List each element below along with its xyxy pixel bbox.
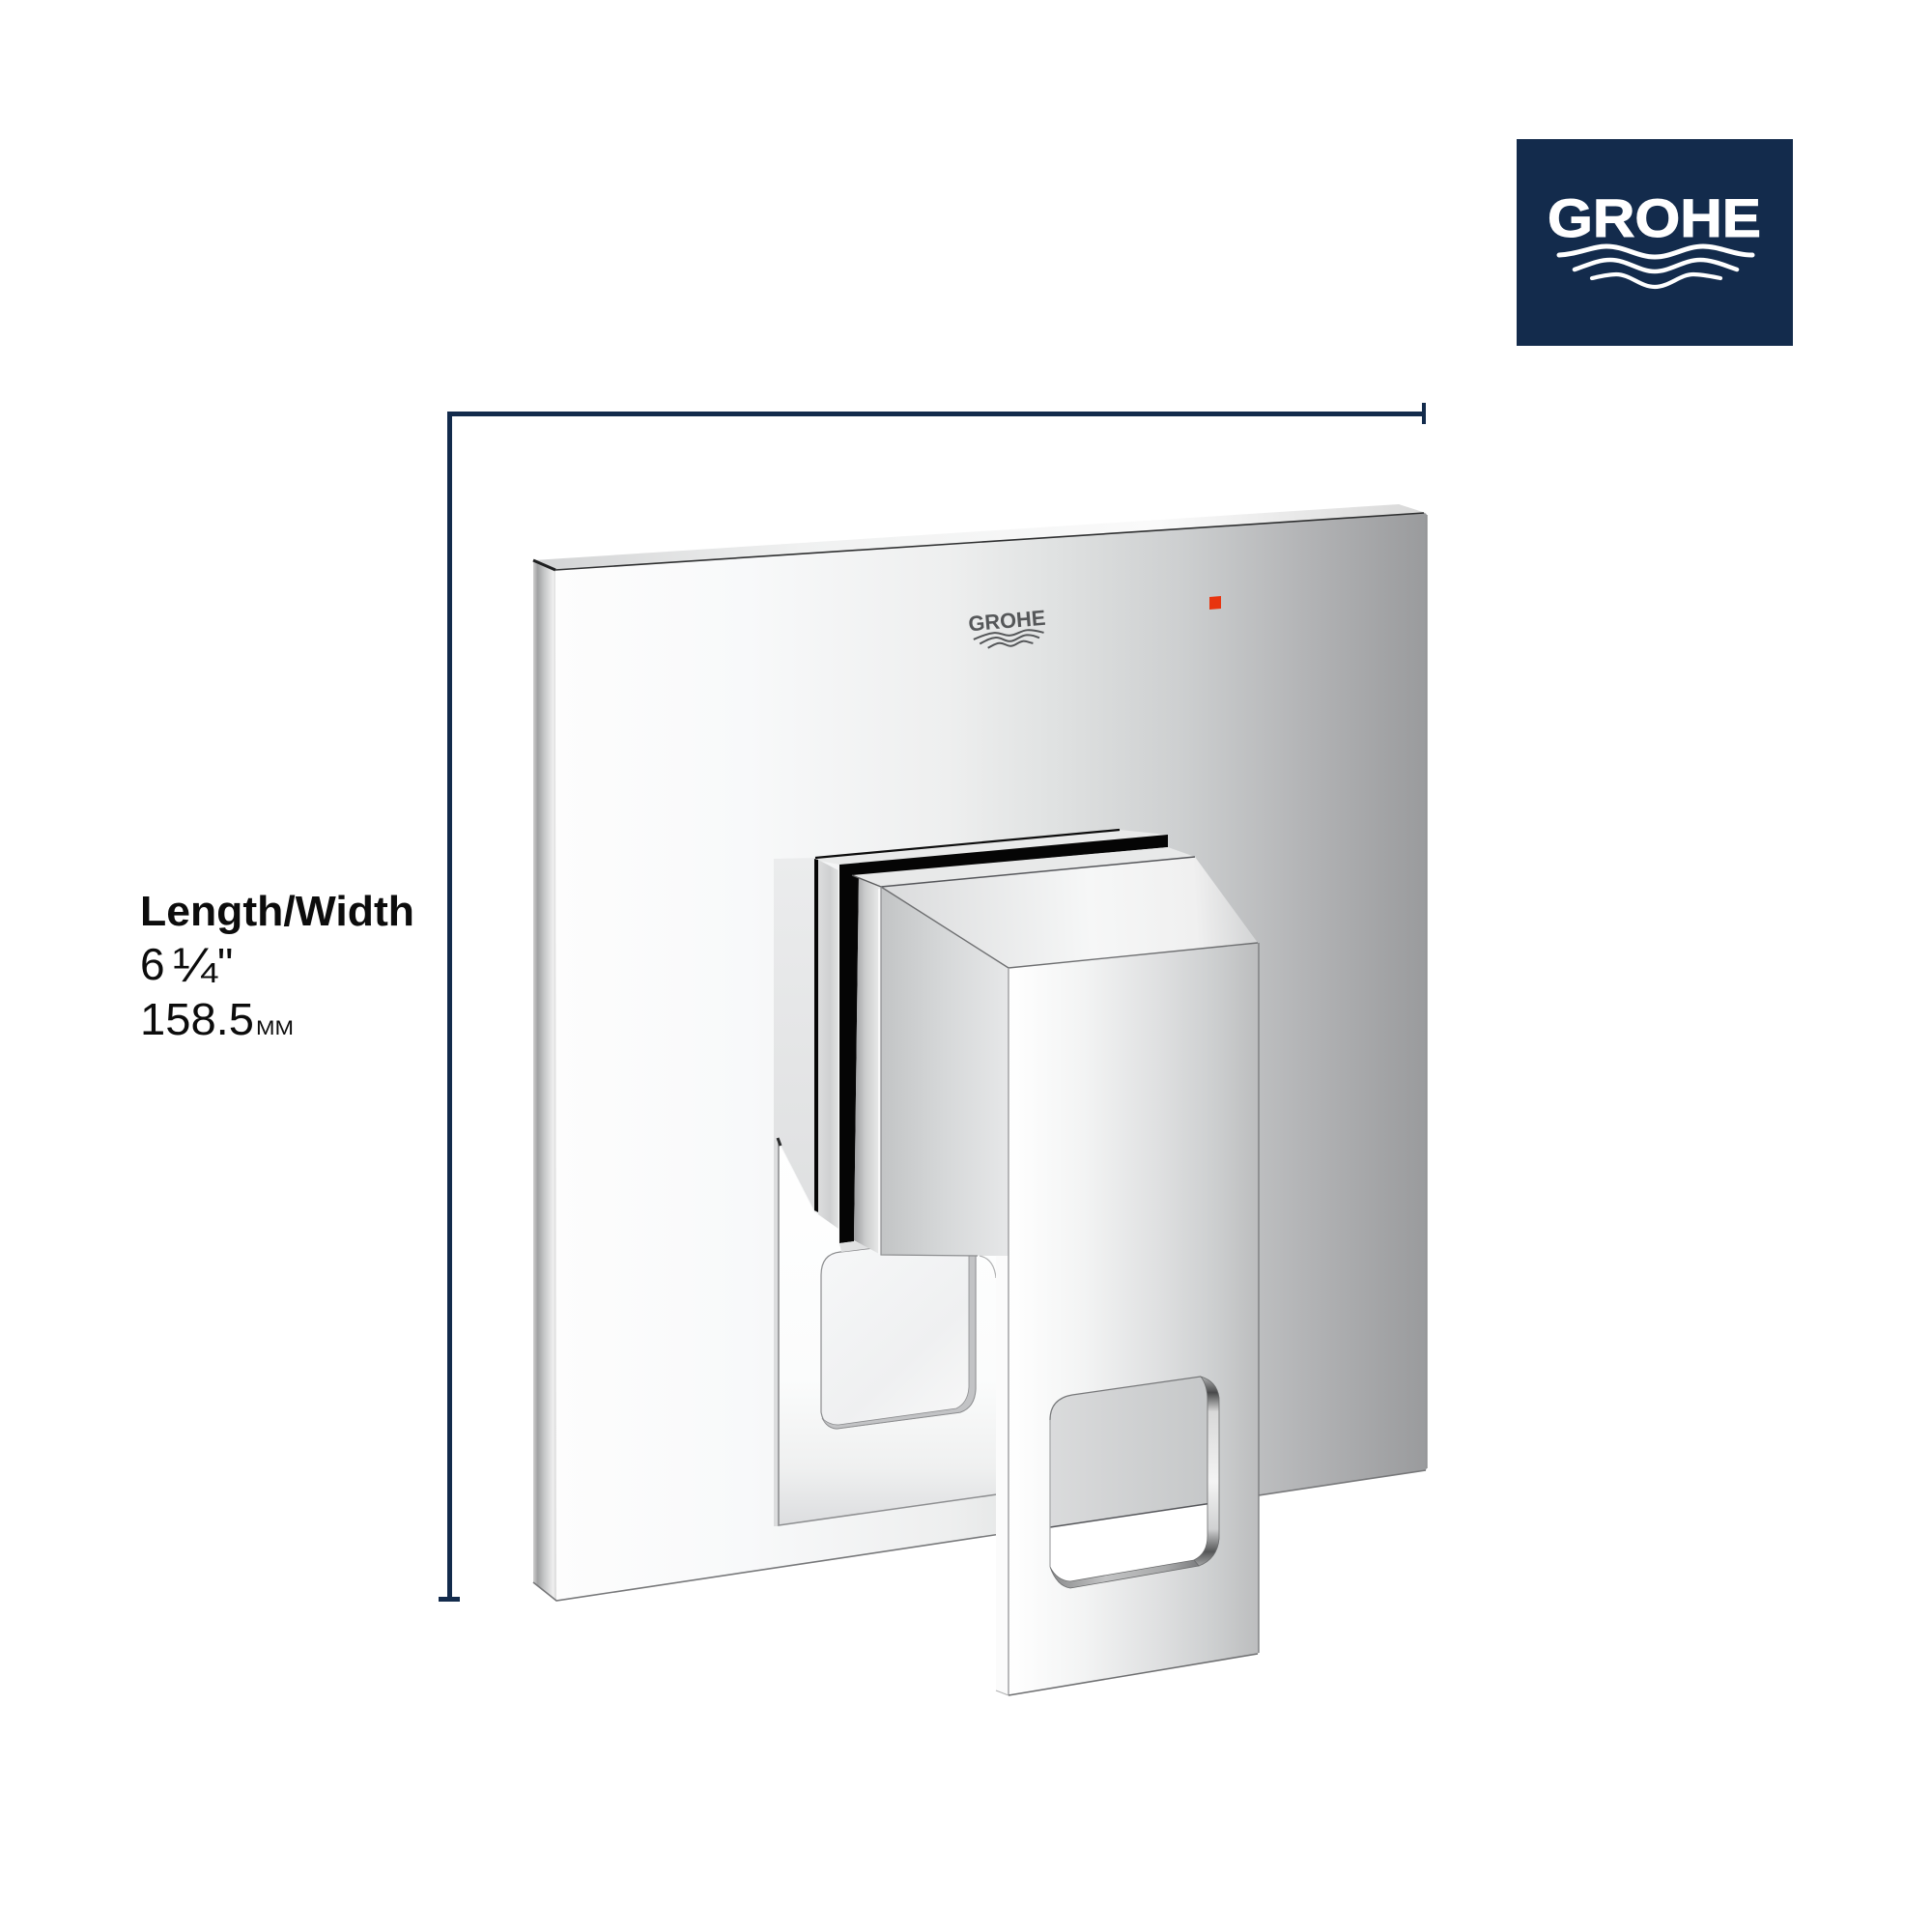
dimension text: length and width: 6 [140,939,165,989]
plate outlines [533,513,1427,1601]
plate top bevel [533,504,1426,570]
wall plate [533,504,1427,1601]
plate embossed logo: GROHE [967,606,1046,636]
lever handle [881,857,1259,1695]
lever lower side edge [996,1256,1009,1695]
rear panel lower face [779,1143,997,1525]
plate seen through grip opening [1050,1372,1212,1527]
light side panel [818,860,838,1229]
top light strip [814,830,1167,865]
plate embossed logo [967,606,1047,649]
lever neck bevel [852,847,1195,887]
brand logo [1517,139,1793,346]
wide black reflection [839,835,1168,1243]
rear panel rounded cut-out [821,1236,996,1429]
lever side face [881,887,1009,1256]
red hot-water marker [1209,596,1221,610]
dimension bracket [439,403,1426,1602]
dimension text: length and width: Length/Width [140,888,414,935]
rear panel upper reflection [774,858,815,1212]
grip opening chrome rim, right [1194,1377,1219,1566]
dimension text: length and width: MM [256,1017,294,1039]
grey side panel [854,875,881,1255]
dimension text: length and width [140,888,414,1044]
plate front face [555,513,1427,1601]
grip opening chrome rim, bottom [1050,1560,1199,1588]
plate left edge [533,560,556,1601]
lever outlines [881,857,1259,1695]
logo waves [1559,246,1752,287]
rear panel left rim [774,1140,779,1526]
brand logo: GROHE [1548,187,1761,248]
lever top face [881,857,1258,968]
lever front face with grip opening [1009,943,1259,1695]
valve body behind lever [774,830,1195,1526]
dimension text: length and width: ¼ [173,938,218,992]
dimension text: length and width: 158.5 [140,994,254,1044]
narrow black reflection [814,859,818,1212]
dimension text: length and width: " [217,939,233,989]
